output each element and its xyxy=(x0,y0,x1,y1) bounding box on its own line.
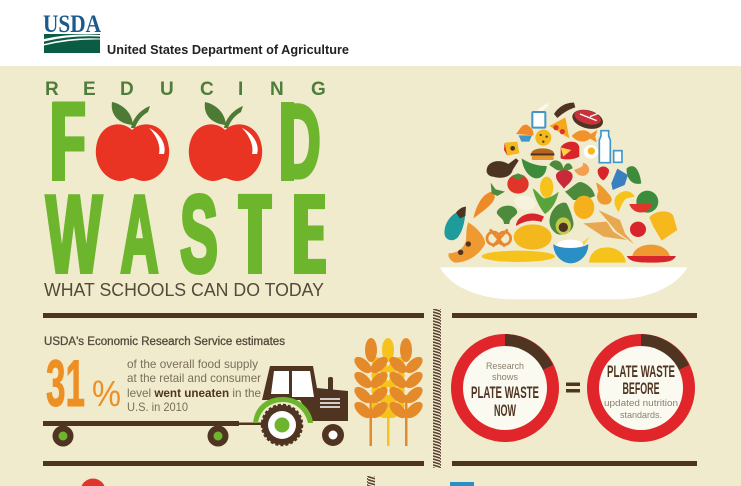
icon: pasta plate xyxy=(627,245,676,263)
department name: United States Department of Agriculture xyxy=(107,43,349,57)
icon: garlic xyxy=(513,196,537,211)
icon: peas xyxy=(522,158,547,178)
label xyxy=(604,362,678,421)
divider rule: right top xyxy=(452,313,697,318)
icon: corn xyxy=(533,177,559,214)
label: updated nutrition xyxy=(604,398,678,409)
label: BEFORE xyxy=(622,379,660,398)
icon: sausage xyxy=(554,103,575,118)
icon: grapes xyxy=(611,166,641,190)
letter W: W xyxy=(46,174,102,296)
icon: red circle cropped xyxy=(80,478,106,486)
grille xyxy=(320,399,340,407)
statistic description xyxy=(127,357,261,414)
exhaust xyxy=(328,377,333,392)
icon: pretzel xyxy=(487,229,511,247)
icon: chicken xyxy=(487,158,519,178)
icon: cheese wedge xyxy=(504,142,519,156)
text: E xyxy=(294,176,326,294)
label: PLATE WASTE xyxy=(471,383,539,402)
letter D xyxy=(279,84,321,200)
icon: croissant xyxy=(448,222,485,263)
vertical hatched divider xyxy=(433,309,441,468)
icon: chili xyxy=(516,214,544,226)
icon: blue square cropped xyxy=(450,482,474,486)
icon: tractor and wagon xyxy=(43,366,348,446)
icon: pizza xyxy=(549,117,569,138)
letter E xyxy=(294,176,326,294)
USDA logo xyxy=(43,11,101,53)
icon: bowl xyxy=(553,237,590,263)
header band xyxy=(0,0,741,66)
statistic description: U.S. in 2010 xyxy=(127,400,188,414)
icon: avocado xyxy=(550,203,573,235)
letter F: F xyxy=(50,84,86,200)
estimate heading: USDA's Economic Research Service estimates xyxy=(44,336,285,348)
title: reducing: REDUCING xyxy=(45,79,326,100)
USDA logo: USDA xyxy=(43,11,101,38)
icon: carrot xyxy=(473,183,505,218)
icon: wheat xyxy=(583,210,634,244)
front wheel xyxy=(322,424,344,446)
icon: eggplant xyxy=(444,207,466,240)
icon: apple right xyxy=(189,102,262,181)
statistic description: at the retail and consumer xyxy=(127,371,261,385)
statistic description: level went uneaten in the xyxy=(127,386,261,400)
icon: steak xyxy=(570,107,605,132)
label: shows xyxy=(492,372,518,383)
divider rule: right bottom xyxy=(452,461,697,466)
tractor body xyxy=(262,366,348,421)
statistic description: of the overall food supply xyxy=(127,357,258,371)
vertical hatched divider: lower xyxy=(367,476,375,486)
wagon xyxy=(43,421,269,446)
label: standards. xyxy=(620,410,662,421)
icon: egg xyxy=(584,145,598,158)
icon: cookie xyxy=(535,130,551,146)
icon: strawberry xyxy=(598,166,609,180)
title: food xyxy=(50,84,321,200)
label: PLATE WASTE xyxy=(607,362,675,381)
icon: cupcake xyxy=(516,125,533,142)
icon: baguette xyxy=(482,251,555,262)
icon: tomato small xyxy=(630,222,646,237)
icon: shrimp xyxy=(574,163,589,176)
letter T xyxy=(238,176,272,294)
statistic: 31 percent: % xyxy=(92,373,121,414)
label: NOW xyxy=(494,401,517,420)
food pyramid illustration xyxy=(440,103,687,299)
icon: pear xyxy=(596,183,612,205)
title: waste xyxy=(46,174,326,296)
plate chart: before xyxy=(587,334,695,442)
letter T: T xyxy=(238,176,272,294)
divider rule: left top xyxy=(43,313,424,318)
icon: loaf xyxy=(589,247,626,263)
icon: red cheese xyxy=(561,142,579,159)
icon: burger xyxy=(531,148,554,160)
subtitle: WHAT SCHOOLS CAN DO TODAY xyxy=(44,279,324,300)
icon: pineapple xyxy=(565,182,595,219)
icon: watermelon xyxy=(629,191,658,213)
rear wheel xyxy=(262,405,302,445)
icon: banana xyxy=(614,191,635,212)
icon: wheat stalks xyxy=(352,338,425,446)
letter S: S xyxy=(180,174,218,296)
icon: apple left xyxy=(96,102,169,181)
letter F xyxy=(50,84,86,200)
label xyxy=(471,361,539,420)
icon: plate xyxy=(440,267,687,299)
divider rule: left bottom xyxy=(43,461,424,466)
cab windows xyxy=(271,371,314,397)
icon: toast xyxy=(649,211,677,241)
statistic: 31 percent: 31 xyxy=(46,346,85,420)
title: waste: A xyxy=(120,174,158,296)
icon: round bread xyxy=(514,224,552,250)
icon: tomato xyxy=(507,173,529,194)
icon: milk bottle and glass xyxy=(599,131,622,163)
label: Research xyxy=(486,361,524,372)
plate chart: now xyxy=(451,334,559,442)
equals sign xyxy=(566,382,580,392)
fender xyxy=(253,397,313,423)
icon: broccoli xyxy=(497,206,517,224)
icon: beet xyxy=(549,160,573,189)
icon: cup xyxy=(532,103,549,128)
letter D: D xyxy=(279,84,321,200)
icon: fish xyxy=(572,130,597,142)
